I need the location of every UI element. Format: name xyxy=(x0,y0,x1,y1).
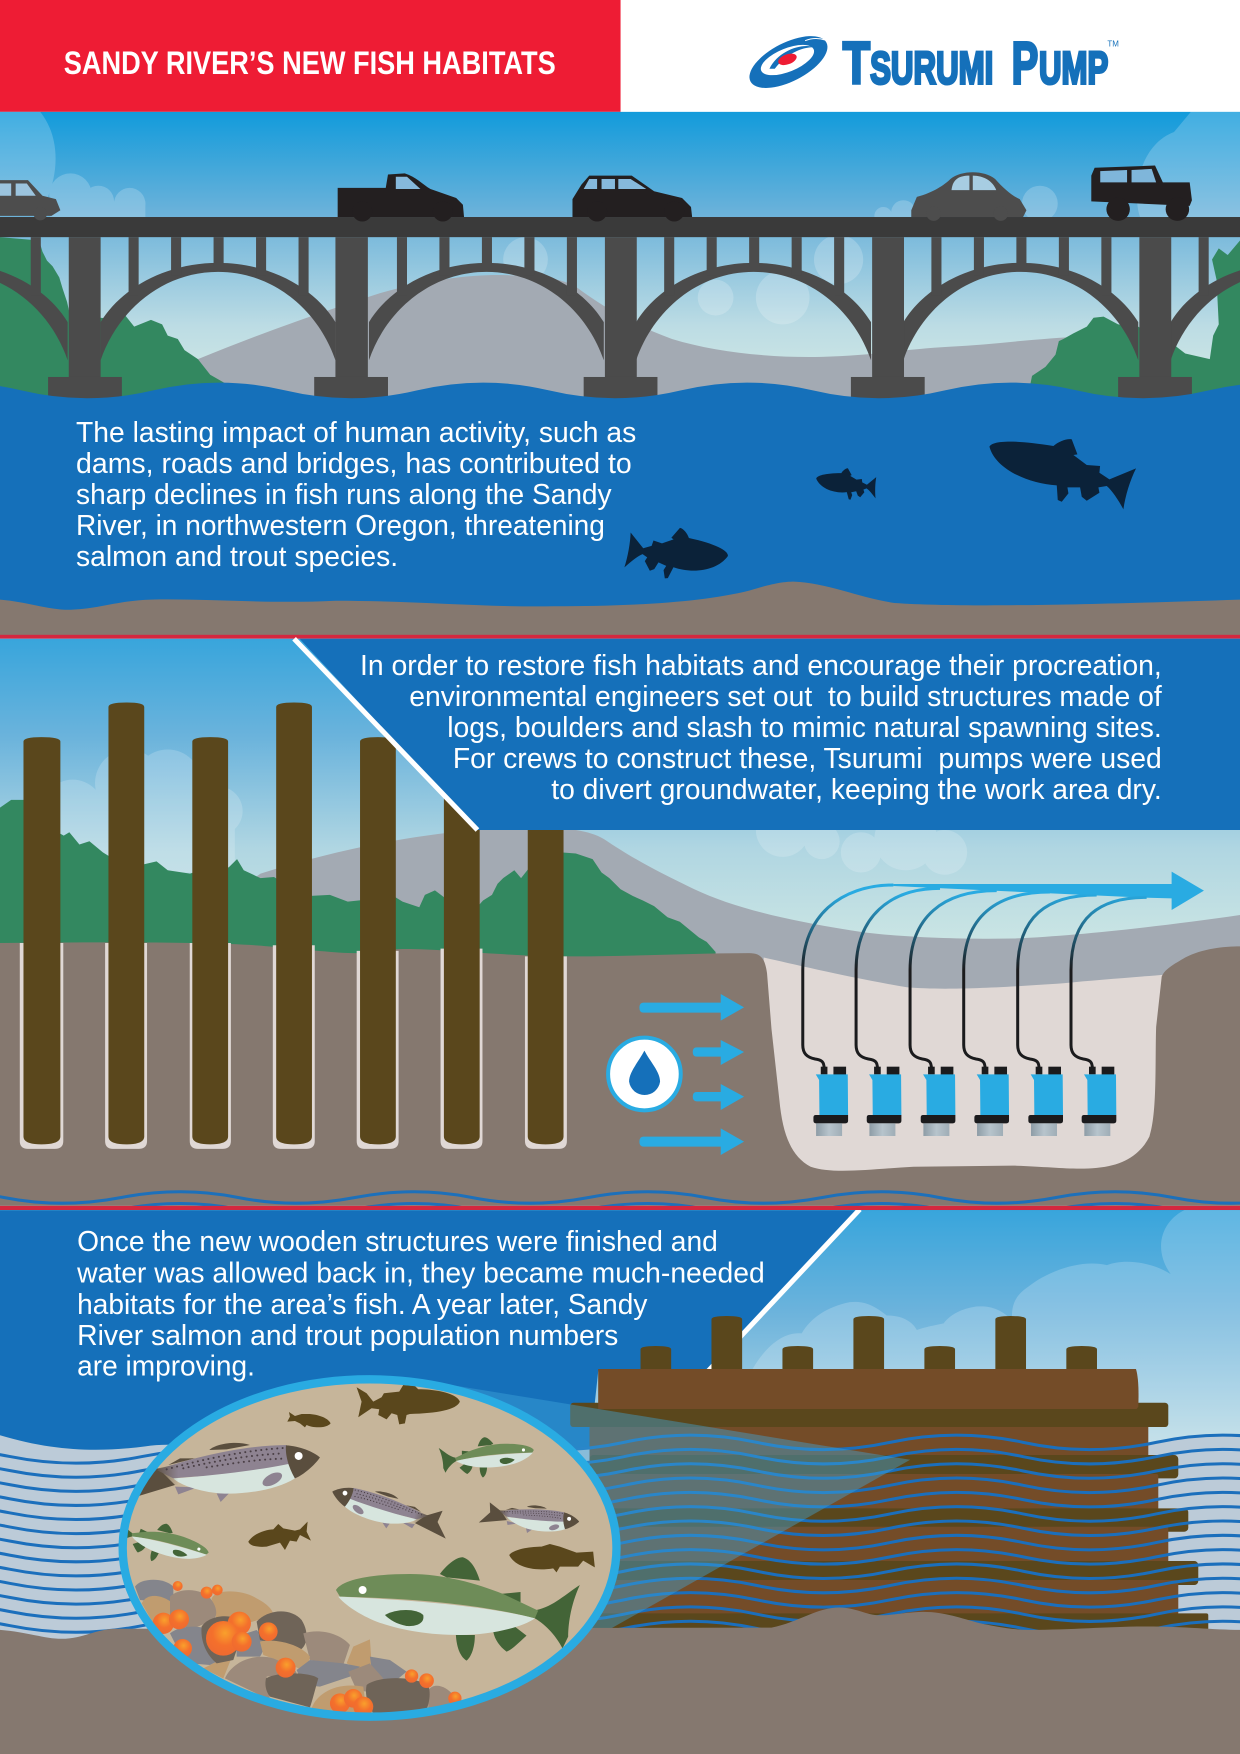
logo: Tsurumi Pump xyxy=(742,25,1119,99)
trees right xyxy=(1028,241,1240,403)
hoses xyxy=(803,885,1147,1068)
text block: human impact: sharp declines in fish runs along the Sandy xyxy=(76,479,612,511)
text block: restoration: environmental engineers set out to build structures made of xyxy=(409,681,1163,713)
text block: results: Once the new wooden structures were finished and xyxy=(77,1226,718,1258)
text block: results: River salmon and trout population numbers xyxy=(77,1320,618,1352)
fish: large green salmon xyxy=(336,1557,580,1661)
pump xyxy=(867,1067,901,1136)
pump xyxy=(1028,1067,1063,1136)
panel: bridge and river xyxy=(0,112,1240,635)
river bed xyxy=(0,582,1240,635)
sky xyxy=(0,639,1240,997)
arrow xyxy=(693,1040,744,1065)
logo wordmark: UMP xyxy=(1039,42,1108,93)
deck xyxy=(0,217,1240,237)
arches xyxy=(0,237,1240,360)
logo wordmark: T xyxy=(843,29,870,96)
text block: results: water was allowed back in, they became much-needed xyxy=(76,1257,765,1290)
underground water waves xyxy=(0,1192,1240,1215)
top stakes xyxy=(641,1316,1097,1370)
car: SUV xyxy=(572,176,692,221)
diagonal white line xyxy=(708,1209,860,1371)
lens ring xyxy=(123,1379,616,1717)
log courses xyxy=(590,1420,1148,1460)
text block: restoration xyxy=(360,650,1163,806)
text block: restoration: logs, boulders and slash to mimic natural spawning sites. xyxy=(447,712,1162,744)
fish silhouette: medium xyxy=(617,510,730,604)
fish: small green salmon xyxy=(439,1437,534,1478)
pale water background left xyxy=(0,1421,291,1644)
icon: water drop xyxy=(608,1038,681,1110)
ground xyxy=(0,1607,1240,1754)
pump xyxy=(974,1067,1009,1136)
mountain xyxy=(198,275,1230,403)
text block: human impact xyxy=(76,417,636,573)
rocks xyxy=(135,1580,453,1713)
fish silhouette: small xyxy=(815,463,881,510)
logo wordmark: SURUMI xyxy=(870,42,993,93)
top log xyxy=(598,1369,1139,1409)
wooden posts xyxy=(23,702,564,1144)
bridge xyxy=(0,217,1240,399)
pump xyxy=(813,1067,848,1136)
car: left xyxy=(0,180,60,220)
text block: human impact: River, in northwestern Oregon, threatening xyxy=(76,510,605,542)
car: pickup truck xyxy=(338,173,464,221)
dewatered pit xyxy=(764,958,1168,1177)
pump xyxy=(1082,1067,1116,1136)
clouds xyxy=(0,749,967,875)
fish: middle trout xyxy=(332,1488,446,1538)
piers xyxy=(48,237,1192,399)
fish silhouette: large xyxy=(989,439,1136,509)
main discharge arrow xyxy=(893,872,1204,910)
trademark: TM xyxy=(1107,40,1119,49)
panel: finished habitat xyxy=(0,1209,1240,1754)
arrow xyxy=(639,1128,744,1155)
trees xyxy=(0,800,716,973)
blue text area xyxy=(0,1210,859,1454)
logo wordmark: P xyxy=(1012,29,1038,96)
magnifier wedge xyxy=(451,1385,910,1658)
river water xyxy=(0,383,1240,635)
lens background xyxy=(123,1379,616,1717)
pump xyxy=(921,1067,955,1136)
salmon eggs xyxy=(153,1581,462,1717)
text block: human impact: salmon and trout species. xyxy=(76,541,398,573)
text block: results xyxy=(76,1226,765,1383)
river waves right xyxy=(491,1435,1240,1636)
trees left xyxy=(0,237,229,403)
pale water background right xyxy=(491,1435,1240,1644)
fish: left green salmon xyxy=(127,1524,208,1562)
fish: silhouettes xyxy=(248,1385,595,1572)
title: SANDY RIVER’S NEW FISH HABITATS xyxy=(64,45,556,81)
arrow xyxy=(639,994,744,1021)
mountain xyxy=(168,827,1240,1007)
text block: results: are improving. xyxy=(77,1351,255,1383)
header banner: red title block xyxy=(0,0,621,112)
fish: large trout xyxy=(120,1443,320,1502)
wooden structure xyxy=(570,1316,1208,1637)
panel: construction with pumps xyxy=(0,639,1240,1215)
text block: human impact: dams, roads and bridges, has contributed to xyxy=(76,448,632,480)
post holes xyxy=(20,943,567,1149)
clouds xyxy=(744,1209,1240,1477)
text block: restoration: For crews to construct these, Tsurumi pumps were used xyxy=(453,743,1162,775)
text block: results: habitats for the area’s fish. A year later, Sandy xyxy=(77,1289,648,1321)
pumps with discharge hoses xyxy=(803,872,1204,1136)
ground xyxy=(0,942,1240,1206)
sky xyxy=(0,1209,1240,1478)
arrow xyxy=(693,1084,744,1110)
sky xyxy=(0,112,1240,403)
clouds xyxy=(0,112,1240,324)
text block: human impact: The lasting impact of human activity, such as xyxy=(76,417,636,449)
car: jeep xyxy=(1091,166,1192,221)
magnifier lens with fish and eggs xyxy=(110,1379,616,1717)
text block: restoration: In order to restore fish habitats and encourage their procreation, xyxy=(360,650,1162,682)
river waves left xyxy=(0,1450,276,1632)
icon: logo swirl xyxy=(742,25,835,99)
text banner xyxy=(300,639,1240,830)
car: beetle xyxy=(911,172,1026,221)
groundwater arrows and drop icon xyxy=(608,994,744,1155)
text block: restoration: to divert groundwater, keeping the work area dry. xyxy=(551,774,1162,806)
fish: right trout xyxy=(479,1502,580,1533)
